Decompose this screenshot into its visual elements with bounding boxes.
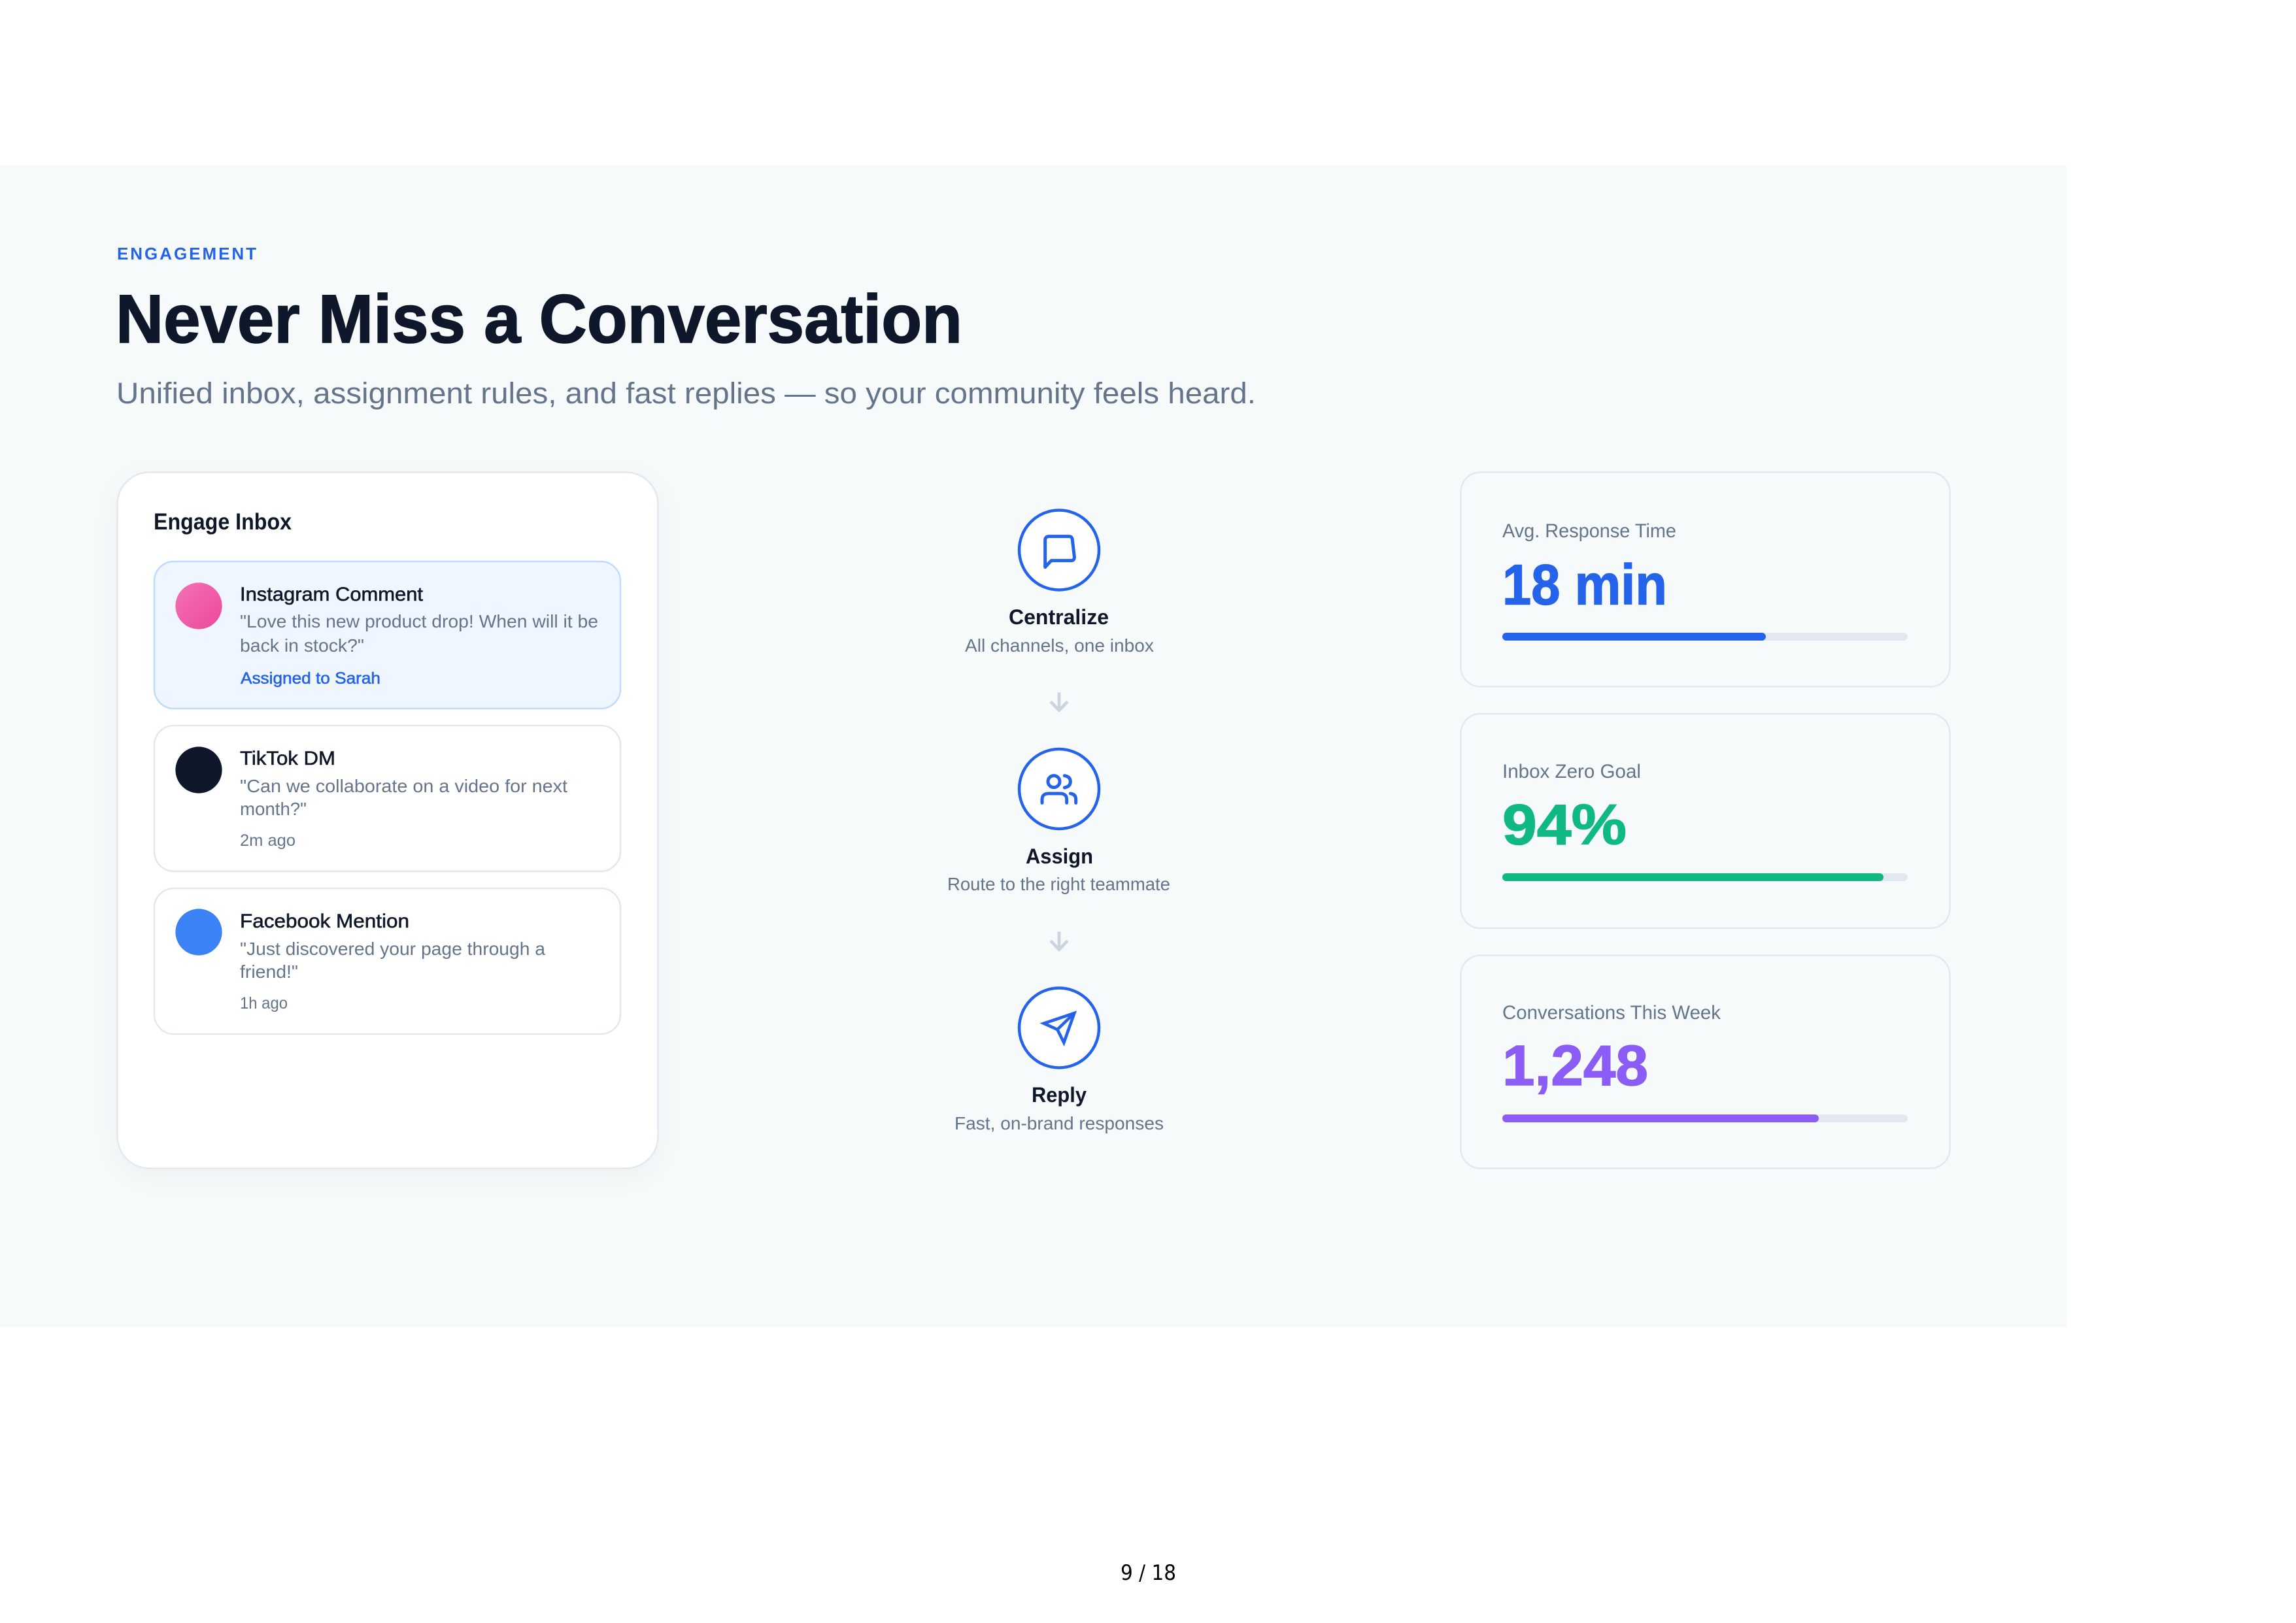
stat label: Conversations This Week — [1502, 1002, 1721, 1024]
avatar: Facebook — [175, 909, 222, 956]
item message: friend!" — [240, 962, 298, 982]
stat value: 94% — [1502, 794, 1627, 856]
timestamp: 2m ago — [240, 831, 295, 850]
step title: Centralize — [1009, 605, 1109, 629]
item message: "Can we collaborate on a video for next — [240, 776, 567, 796]
avatar: TikTok — [175, 746, 222, 794]
stat label: Avg. Response Time — [1502, 520, 1676, 542]
step: Assign — [947, 749, 1170, 894]
stat label: Inbox Zero Goal — [1502, 761, 1641, 782]
item message: month?" — [240, 799, 307, 819]
item message — [240, 939, 546, 982]
progress bar — [1502, 1114, 1908, 1122]
item message: back in stock?" — [240, 635, 364, 656]
step: Reply — [954, 988, 1164, 1133]
item message: "Just discovered your page through a — [240, 939, 546, 959]
arrow: down 2 — [1051, 931, 1068, 950]
stat card: response time — [1460, 472, 1950, 686]
item title: TikTok DM — [240, 748, 335, 769]
avatar: Instagram — [175, 582, 222, 629]
page number: 9 / 18 — [1121, 1560, 1176, 1585]
inbox heading: Engage Inbox — [154, 509, 292, 535]
slide background — [0, 165, 2067, 1328]
icon: message bubble — [1019, 510, 1099, 590]
title: Never Miss a Conversation — [116, 281, 962, 358]
progress bar — [1502, 873, 1908, 881]
subtitle: Unified inbox, assignment rules, and fast replies — so your community feels heard. — [116, 376, 1256, 410]
panel: engage inbox — [118, 472, 658, 1169]
inbox item: TikTok DM — [154, 726, 620, 871]
step description: Fast, on-brand responses — [954, 1113, 1164, 1133]
stat value: 1,248 — [1502, 1034, 1648, 1097]
step: Centralize — [965, 510, 1154, 656]
stat card: inbox zero — [1460, 714, 1950, 928]
step title: Reply — [1032, 1083, 1087, 1107]
item message: "Love this new product drop! When will it be — [240, 611, 598, 631]
timestamp: 1h ago — [240, 994, 288, 1012]
eyebrow label: ENGAGEMENT — [117, 244, 256, 263]
item message — [240, 776, 567, 819]
item message — [240, 611, 598, 656]
progress bar — [1502, 633, 1908, 641]
inbox item: Facebook mention — [154, 888, 620, 1034]
item title: Instagram Comment — [240, 584, 424, 605]
step title: Assign — [1026, 845, 1093, 868]
arrow: down 1 — [1051, 692, 1068, 711]
inbox item: Instagram comment — [154, 561, 620, 709]
assignment tag: Assigned to Sarah — [241, 669, 380, 688]
icon: users — [1019, 749, 1099, 829]
item title: Facebook Mention — [240, 911, 409, 932]
step description: All channels, one inbox — [965, 635, 1154, 656]
icon: send — [1019, 988, 1099, 1068]
step description: Route to the right teammate — [947, 874, 1170, 894]
stat card: conversations — [1460, 956, 1950, 1169]
stat value: 18 min — [1502, 553, 1667, 617]
